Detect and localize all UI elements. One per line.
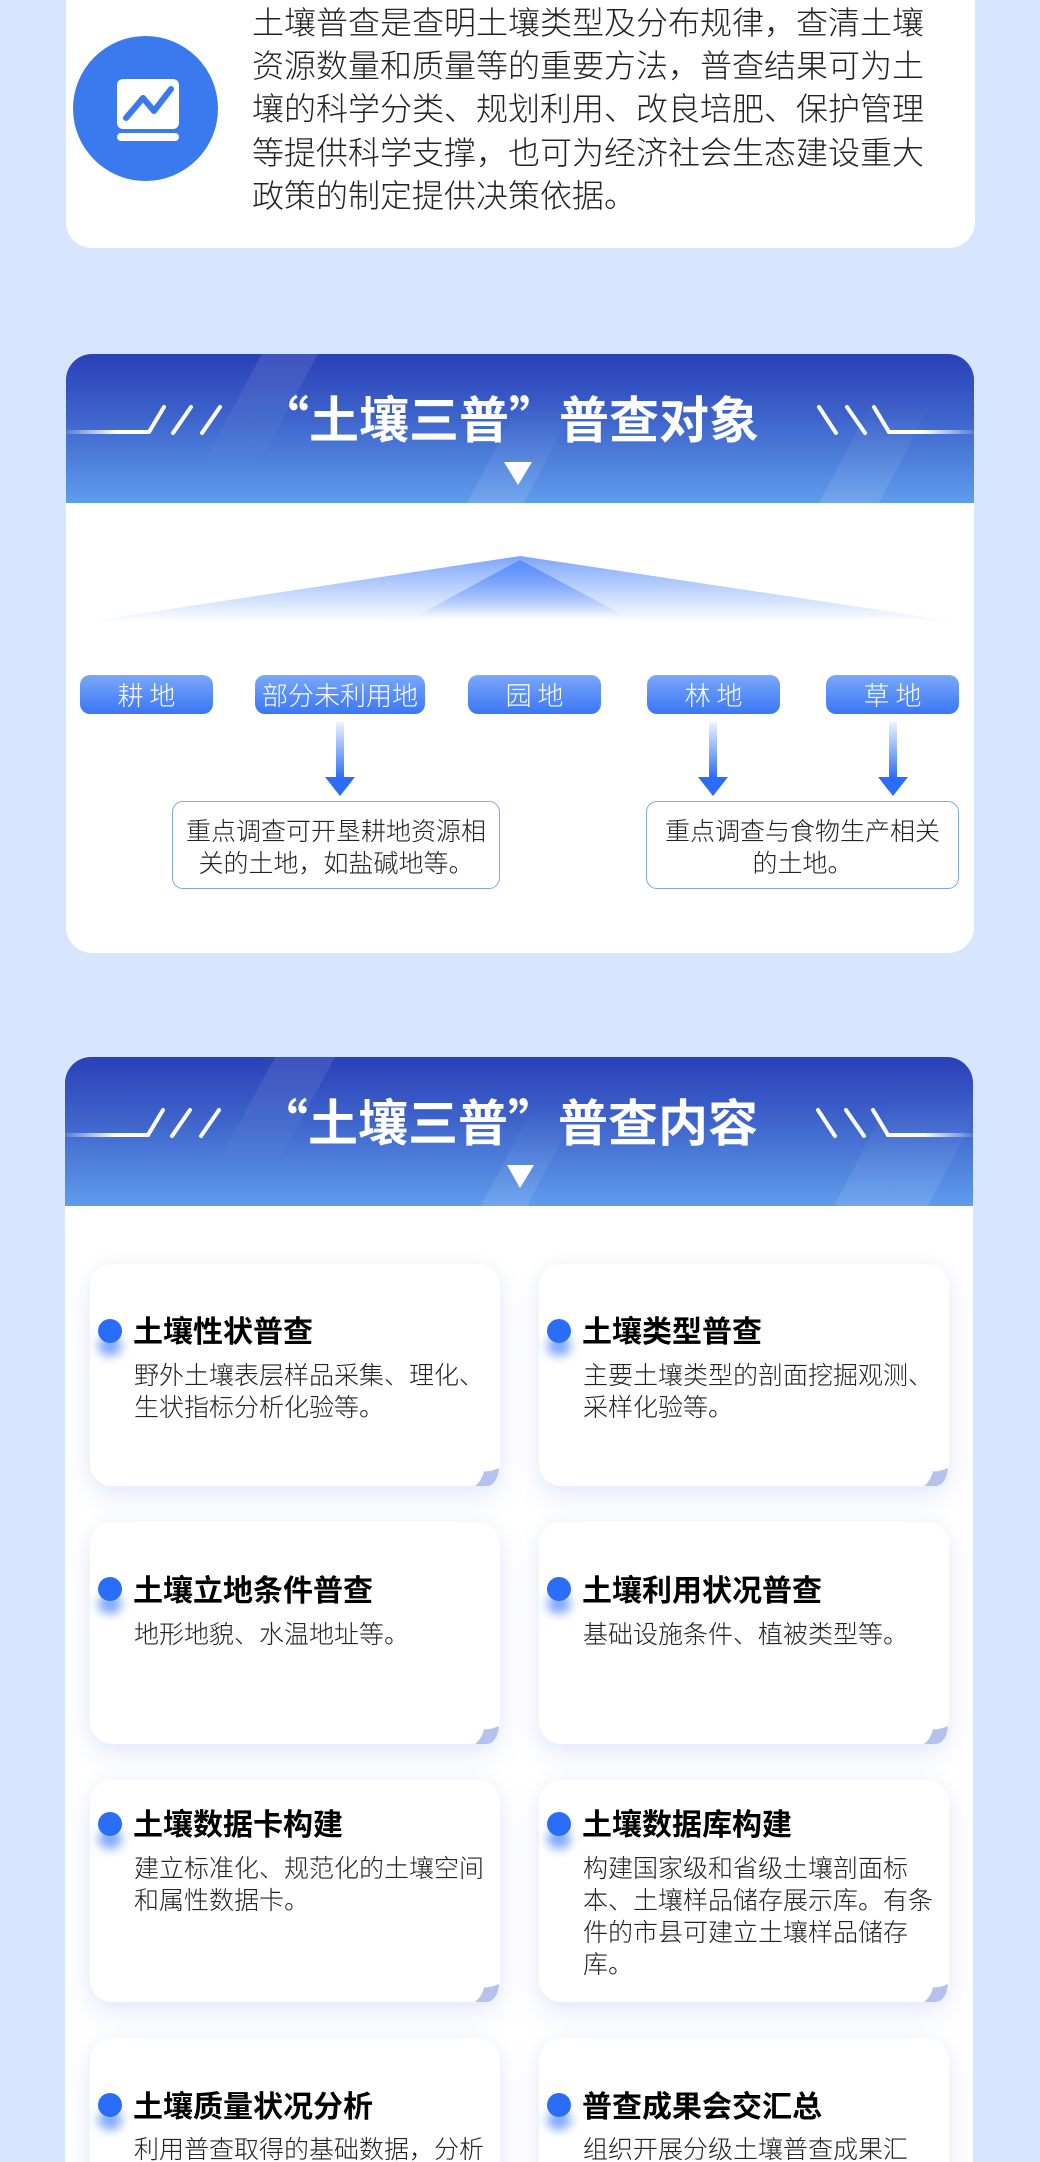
card title: 土壤数据库构建 — [582, 1800, 792, 1844]
card body: 主要土壤类型的剖面挖掘观测、 — [583, 1356, 933, 1392]
card body — [134, 1356, 484, 1424]
card body: 生状指标分析化验等。 — [134, 1388, 384, 1424]
card body — [583, 1356, 933, 1424]
callout: unused land note: 重点调查可开垦耕地资源相 — [186, 812, 486, 848]
category pill: 草地: 草 地 — [864, 676, 921, 713]
text block: introduction — [252, 0, 924, 217]
heading banner: survey content — [65, 1057, 973, 1206]
card body: 件的市县可建立土壤样品储存 — [583, 1913, 908, 1949]
category pill: 林地 — [647, 675, 780, 714]
callout: forest and grass note: 重点调查与食物生产相关 — [665, 812, 940, 848]
text block: introduction: 壤的科学分类、规划利用、改良培肥、保护管理 — [252, 84, 924, 130]
category pill: 草地 — [826, 675, 959, 714]
card body: 和属性数据卡。 — [134, 1881, 309, 1917]
callout: unused land note: 关的土地，如盐碱地等。 — [198, 844, 474, 880]
callout: forest and grass note: 的土地。 — [752, 844, 852, 880]
card body: 建立标准化、规范化的土壤空间 — [134, 1849, 484, 1885]
card title: 土壤数据卡构建 — [133, 1800, 343, 1844]
card body: 采样化验等。 — [583, 1388, 733, 1424]
callout: unused land note — [172, 801, 500, 889]
card body — [134, 1849, 484, 1917]
card body: 构建国家级和省级土壤剖面标 — [583, 1849, 908, 1885]
arrow: 部分未利用地 to note — [325, 722, 355, 796]
card title: 土壤利用状况普查 — [582, 1566, 822, 1610]
card: soil properties — [90, 1264, 500, 1486]
heading text: “土壤三普”普查内容 — [258, 1084, 758, 1156]
card body: 野外土壤表层样品采集、理化、 — [134, 1356, 484, 1392]
panel: survey content — [65, 1057, 973, 2162]
heading banner: survey objects — [66, 354, 974, 503]
card: land use — [539, 1522, 949, 1744]
text block: introduction: 政策的制定提供决策依据。 — [252, 171, 636, 217]
card title: 土壤性状普查 — [133, 1307, 313, 1351]
panel: survey objects — [66, 354, 974, 953]
heading text: “土壤三普”普查对象 — [259, 381, 759, 453]
card body — [583, 1849, 933, 1981]
card: site conditions — [90, 1522, 500, 1744]
card: quality analysis — [90, 2038, 500, 2162]
card body: 基础设施条件、植被类型等。 — [583, 1615, 908, 1651]
card body: 库。 — [583, 1945, 633, 1981]
category pill: 园地: 园 地 — [506, 676, 563, 713]
category pill: 园地 — [468, 675, 601, 714]
card: data cards — [90, 1780, 500, 2002]
arrow: 草地 to note — [878, 722, 908, 796]
text block: introduction: 等提供科学支撑，也可为经济社会生态建设重大 — [252, 128, 924, 174]
card title: 土壤质量状况分析 — [133, 2082, 373, 2126]
category pill: 部分未利用地: 部分未利用地 — [262, 676, 418, 713]
card title: 普查成果会交汇总 — [582, 2082, 822, 2126]
category pill: 耕地 — [80, 675, 213, 714]
card: results summary — [539, 2038, 949, 2162]
arrow: 林地 to note — [698, 722, 728, 796]
category pill: 耕地: 耕 地 — [118, 676, 175, 713]
card title: 土壤立地条件普查 — [133, 1566, 373, 1610]
card: soil types — [539, 1264, 949, 1486]
card body: 地形地貌、水温地址等。 — [134, 1615, 409, 1651]
callout: forest and grass note — [646, 801, 959, 889]
card body: 本、土壤样品储存展示库。有条 — [583, 1881, 933, 1917]
text block: introduction: 资源数量和质量等的重要方法，普查结果可为土 — [252, 41, 924, 87]
icon: chart in blue circle — [73, 36, 218, 181]
panel: introduction — [66, 0, 975, 248]
chart: fan shape — [114, 556, 930, 618]
category pill: 林地: 林 地 — [685, 676, 742, 713]
card title: 土壤类型普查 — [582, 1307, 762, 1351]
card: database — [539, 1780, 949, 2002]
